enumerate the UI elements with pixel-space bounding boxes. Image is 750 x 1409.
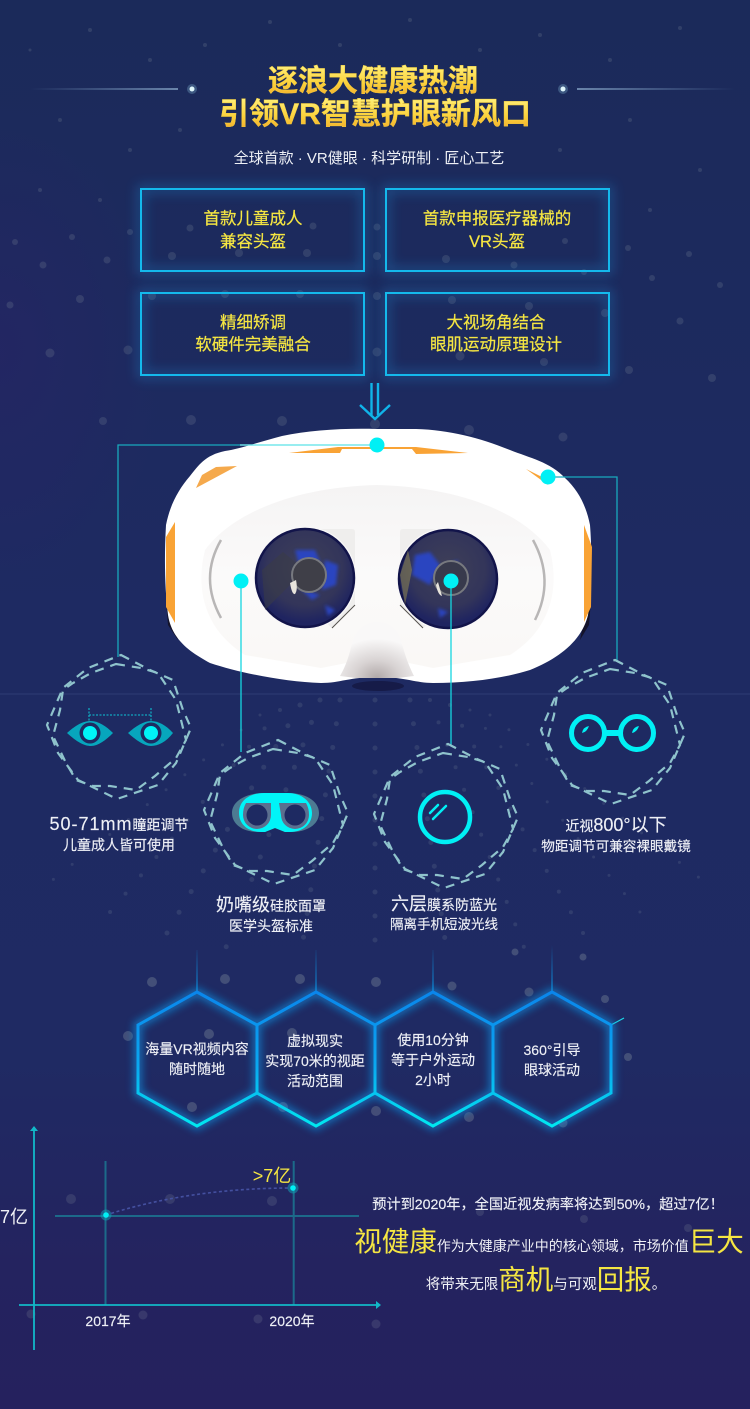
title: 逐浪大健康热潮 <box>268 65 478 98</box>
panel: feature box 3: 软硬件完美融合 <box>195 335 311 354</box>
panel: feature box 3: 精细矫调 <box>220 313 286 332</box>
panel: feature box 2: VR头盔 <box>469 232 525 251</box>
text block: market summary: 将带来无限商机与可观回报。 <box>426 1264 666 1295</box>
hexagon text 4 <box>524 1042 580 1078</box>
icon: glasses <box>572 716 654 750</box>
subtitle: 全球首款 · VR健眼 · 科学研制 · 匠心工艺 <box>234 149 504 167</box>
label: blue light filter: 六层膜系防蓝光 <box>391 894 497 914</box>
label: pupil distance: 50-71mm瞳距调节 <box>49 814 189 834</box>
label: glasses: 近视800°以下 <box>565 815 667 835</box>
hexagon text 4: 眼球活动 <box>524 1062 580 1078</box>
icon: eyes <box>67 708 173 746</box>
line chart: >7亿 <box>253 1166 291 1186</box>
icon: silicone mask <box>232 793 319 832</box>
line chart: 2020年 <box>269 1313 315 1329</box>
panel: feature box 4: 眼肌运动原理设计 <box>430 335 562 354</box>
title: 引领VR智慧护眼新风口 <box>219 98 531 131</box>
hexagon text 3: 2小时 <box>415 1072 451 1088</box>
title <box>219 65 531 131</box>
label: blue light filter <box>390 894 498 932</box>
label: silicone mask <box>216 895 326 934</box>
line chart: 7亿 <box>0 1207 28 1227</box>
hexagon text 2: 实现70米的视距 <box>265 1053 365 1069</box>
arrow: down <box>360 383 390 419</box>
hexagon group <box>138 945 624 1126</box>
VR headset <box>165 429 592 691</box>
dashed ring: silicone mask <box>204 740 348 884</box>
hexagon text 1 <box>145 1041 249 1077</box>
text block: market summary: 预计到2020年，全国近视发病率将达到50%，超过7亿！ <box>372 1196 724 1213</box>
text block: market summary <box>354 1196 744 1295</box>
panel: feature box 1 <box>141 189 364 271</box>
panel: feature box 4 <box>386 293 609 375</box>
callout markers <box>234 438 556 588</box>
hexagon text 3: 使用10分钟 <box>397 1032 469 1048</box>
label: glasses: 物距调节可兼容裸眼戴镜 <box>541 838 691 854</box>
dashed ring: pupil distance <box>47 655 191 799</box>
text block: market summary: 视健康作为大健康产业中的核心领域，市场价值巨大 <box>354 1226 744 1257</box>
label: silicone mask: 奶嘴级硅胶面罩 <box>216 895 326 915</box>
panel: feature box 2: 首款申报医疗器械的 <box>423 209 571 228</box>
label: pupil distance <box>49 814 189 853</box>
panel: feature box 1: 首款儿童成人 <box>204 209 302 228</box>
right title ornament <box>558 84 735 94</box>
label: blue light filter: 隔离手机短波光线 <box>390 916 498 932</box>
dashed ring: glasses <box>541 660 685 804</box>
label: silicone mask: 医学头盔标准 <box>229 918 313 934</box>
hexagon text 2: 活动范围 <box>287 1073 343 1089</box>
panel: feature box 2 <box>386 189 609 271</box>
line chart <box>0 1126 381 1350</box>
hexagon text 4: 360°引导 <box>524 1042 580 1058</box>
panel: feature box 4: 大视场角结合 <box>446 313 546 332</box>
panel: feature box 1: 兼容头盔 <box>220 232 286 251</box>
label: pupil distance: 儿童成人皆可使用 <box>63 837 175 853</box>
hexagon text 2: 虚拟现实 <box>287 1033 343 1049</box>
label: glasses <box>541 815 691 854</box>
panel: feature box 3 <box>141 293 364 375</box>
hexagon text 3: 等于户外运动 <box>391 1052 475 1068</box>
hexagon text 2 <box>265 1033 365 1089</box>
hexagon text 1: 海量VR视频内容 <box>145 1041 249 1057</box>
hexagon text 3 <box>391 1032 475 1088</box>
hexagon text 1: 随时随地 <box>169 1061 225 1077</box>
icon: coated lens <box>420 792 470 842</box>
line chart: 2017年 <box>85 1313 131 1329</box>
callout connector lines <box>118 445 617 752</box>
dashed ring: lens coating <box>374 744 518 888</box>
left title ornament <box>30 84 197 94</box>
